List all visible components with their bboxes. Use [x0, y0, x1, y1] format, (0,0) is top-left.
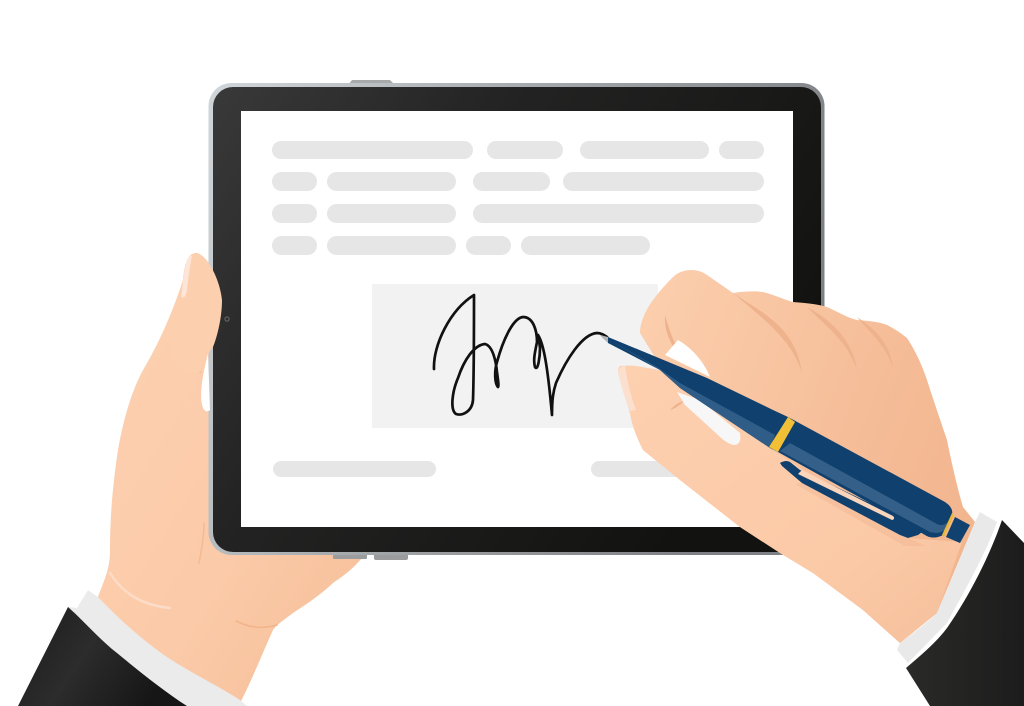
right hand back: [618, 270, 975, 643]
knuckle creases: [665, 293, 893, 410]
tablet: [208, 80, 824, 560]
thumb nail highlight: [181, 256, 192, 298]
lower palm below the pen: [618, 366, 962, 643]
pen end cap: [946, 517, 970, 543]
left hand creases: [110, 364, 277, 627]
tablet frame: [208, 83, 824, 555]
tablet bezel: [213, 87, 821, 552]
right hand: [618, 270, 975, 643]
bottom right side button: [374, 553, 408, 560]
pen tip: [600, 335, 608, 343]
pen body: [608, 337, 952, 538]
pen shadow: [795, 483, 926, 546]
lighter stripe rear: [780, 443, 948, 533]
left jacket sleeve: [18, 607, 187, 706]
left thumb: [172, 253, 222, 374]
top side button: [349, 80, 394, 84]
document placeholder lines: [272, 141, 764, 477]
pen clip slot: [798, 470, 894, 520]
thumb nail highlight: [618, 366, 636, 411]
right jacket sleeve: [906, 520, 1024, 706]
signature box: [372, 284, 658, 428]
gold band: [769, 417, 795, 452]
bottom left side button: [333, 553, 367, 559]
signature stroke: [434, 295, 607, 415]
left hand palm: [85, 253, 362, 703]
right cuff: [897, 512, 997, 663]
pen: [600, 335, 970, 543]
white gap between left thumb and tablet: [201, 353, 210, 411]
upper gap between thumb and finger: [665, 340, 710, 377]
small gold band: [942, 513, 954, 537]
tablet screen: [241, 111, 793, 527]
pen clip: [780, 461, 925, 538]
lighter stripe front: [610, 340, 775, 448]
left cuff: [68, 590, 247, 706]
thumb shape: [172, 253, 222, 374]
camera: [225, 317, 229, 321]
lower gap between thumb and finger: [677, 392, 740, 445]
